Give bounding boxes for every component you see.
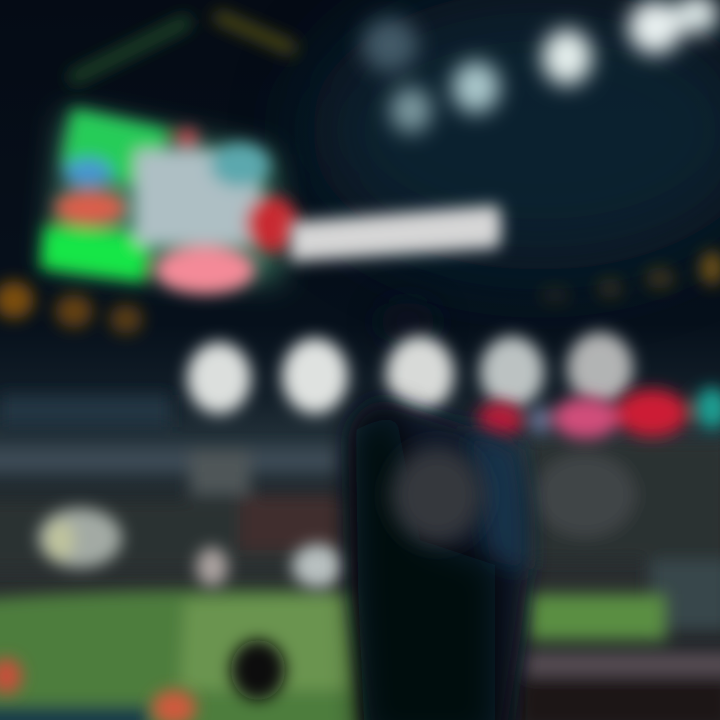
colourful screen (40, 108, 298, 294)
row of white circles (187, 332, 633, 414)
amber lights left (0, 281, 143, 334)
crowd band (0, 395, 720, 630)
orange markers (0, 658, 196, 720)
stands lights above field (38, 508, 344, 588)
field (0, 590, 720, 720)
person head shadow (378, 302, 438, 342)
chest badge (391, 447, 483, 543)
person silhouette (348, 400, 530, 720)
dark ball (231, 640, 285, 700)
white bar (290, 205, 502, 262)
coloured strip (477, 387, 720, 439)
upper right haze (310, 0, 720, 270)
amber lights right (540, 251, 720, 303)
top green and gold streaks (70, 15, 295, 80)
floating lights (362, 0, 719, 133)
